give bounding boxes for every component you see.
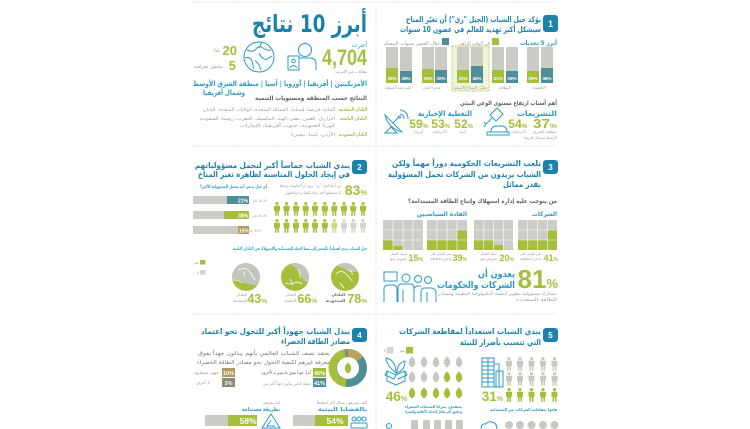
legislation group: الأوسط وشمال أفريقيا [524, 135, 557, 140]
icon: satellite dish [385, 110, 408, 133]
countries stat: 20 [223, 43, 237, 58]
panel: 2 youth responsibility [193, 159, 367, 306]
highlight box [452, 46, 489, 91]
stat: 46 percent: 46% [386, 389, 408, 404]
sustainability note: جيل الشباب يبدي اهتماماً بالسعي إلى نمط الحياة المستدامة والاستهلاك في البلدان النامية [233, 245, 367, 252]
description text [197, 349, 331, 366]
heading 4: يبذل الشباب جهوداً أكبر للتحول نحو اعتماد [201, 325, 350, 336]
chart: donut [333, 353, 363, 383]
heading 2: يبدي الشباب حماساً أكبر لتحمل مسؤولياتهم [195, 159, 350, 170]
bar chart: generations: 18-19 عام [253, 198, 267, 203]
heading 1: سيشكل أكبر تهديد للعالم في غضون 10 سنوات [400, 24, 541, 34]
legislation group: منطقة الشرق [533, 129, 557, 134]
heading 2: في إيجاد الحلول المناسبة لظاهرة تغير المناخ [198, 170, 350, 179]
stat: 31 percent [482, 389, 557, 412]
sustainable label [242, 400, 280, 413]
stat: 83 percent: 83% [345, 182, 367, 198]
description text: معرفة غيرهم لكيفية التحول نحو مصادر الطاقة الخضراء [197, 359, 330, 366]
bar: 58 percent: 58% [239, 416, 257, 426]
chart: developed 43 percent: 43% [247, 292, 267, 306]
effort row: 46 percent: 46% [314, 371, 325, 377]
bar chart: challenges: 29% [507, 76, 517, 81]
bar chart: generations: 38% [238, 214, 249, 220]
bar chart: challenges: 40% [472, 76, 482, 81]
effort row: 3 percent: 3% [225, 381, 233, 387]
stat: 81 percent: يعدون أن [478, 267, 515, 280]
legislation group: الأمريكيتان [511, 129, 526, 134]
badge 1: 1 [548, 19, 553, 29]
regions list: الأمريكيتين | أفريقيا | أوروبا | آسيا | منطقة الشرق الأوسط [193, 79, 367, 89]
pictogram: people 31 percent [506, 357, 558, 402]
waffle: companies 41 percent: إنتاج الطاقة [520, 257, 541, 262]
legend: regions [194, 260, 206, 275]
waffle: leaders 39 percent: إنتاج الطاقة [430, 257, 451, 262]
heading 4: مصادر الطاقة الخضراء [281, 337, 350, 346]
legislation group: 37 % [533, 117, 557, 131]
frontier countries [291, 131, 367, 138]
chart: frontier 78 percent: 78% [347, 292, 367, 306]
waffle: leaders 39 percent: 39% [453, 253, 468, 263]
icon: gavel [484, 108, 509, 135]
panel: 4 green energy [194, 325, 367, 428]
heading 3: الشباب يريدون من الشركات تحمل المسؤولية [388, 170, 541, 179]
bar chart: challenges: البطالة [499, 85, 511, 90]
legend: regions: نعم [194, 261, 199, 265]
chart: emerging 66 percent [281, 263, 317, 306]
bar chart: challenges: الفقر/عدم المساواة [385, 85, 411, 90]
stat: 46 percent [386, 389, 462, 414]
bar chart: generations: +35 عام [247, 228, 262, 233]
heading 5: التي تتسبب بأضرار للبيئة [460, 337, 541, 347]
panel: 3 government and companies [383, 157, 559, 303]
frontier countries: البلدان المحدودية [339, 132, 367, 138]
legislation group [508, 109, 557, 140]
badge 2 [352, 160, 367, 174]
regions stat [194, 58, 236, 73]
environment issues label [317, 399, 367, 413]
heading 1: يؤكد جيل الشباب (الجيل "زي") أن تغيّر المناخ [406, 14, 541, 24]
heading 2 [195, 159, 350, 179]
stat: 31 percent: 31% [482, 389, 504, 404]
stat: 81 percent: تتشارك مسؤولية تطوير أنظمة التكنولوجيا النظيفة ومصادر [437, 290, 558, 297]
heading 4 [201, 325, 350, 346]
effort row: 41 percent: معظم الناس يبذلون جهداً أكثر مني [263, 380, 311, 387]
waffle: leaders 15 percent: نمط العمل [390, 252, 407, 256]
pictogram: leaves 46 percent [409, 356, 462, 398]
bar chart: challenges [385, 47, 553, 90]
bar chart: challenges: 29% [528, 76, 538, 81]
waffle: companies 20 percent: نمط العمل [480, 252, 497, 256]
effort row: 10 percent: 10% [223, 371, 234, 377]
badge 3: 3 [548, 163, 553, 172]
legend [384, 38, 557, 47]
chart: frontier 78 percent: البلدان [332, 292, 346, 297]
sustainable label: بطريقة مستدامة [242, 407, 280, 413]
heading 5: يبدي الشباب استعداداً لمقاطعة الشركات [399, 325, 541, 336]
icon: lower left [386, 424, 392, 428]
chart: emerging 66 percent: 66% [297, 292, 317, 306]
effort row: 10 percent: جهود متشابهة [194, 371, 219, 376]
politicians label: القادة السياسيين [417, 211, 467, 218]
development heading: النتائج حسب المنطقة ومستويات التنمية [255, 95, 367, 102]
stat: 31 percent: قاموا بمقاطعة الشركات غير المستدامة [490, 407, 557, 412]
regions list [193, 79, 367, 97]
bar chart: challenges: الاقتصاد [532, 85, 546, 90]
description text: يعتقد نصف الشباب العالمي بأنهم يبذلون جهداً يفوق [198, 349, 331, 357]
legend: في الوقت الراهن [459, 41, 491, 47]
awareness heading: أهم أسباب ارتفاع مستوى الوعي البيئي [460, 99, 557, 107]
environment issues label: بالقضايا البيئية [318, 407, 367, 413]
effort row: 10 percent [194, 368, 235, 377]
stat: 81 percent: 81% [518, 264, 558, 294]
badge 5: 5 [548, 331, 553, 340]
emerging countries: البرازيل، الصين، مصر، الهند، المكسيك، المغرب، روسيا، السعودية [200, 116, 335, 122]
stat: 81 percent: الشركات والحكومات [437, 280, 515, 291]
heading 3: تلعب التشريعات الحكومية دوراً مهماً ولكن [392, 157, 541, 168]
legend: yes no: نعم [400, 348, 405, 353]
bar chart: challenges: 31% [493, 76, 503, 81]
news coverage group: الأمريكيتان [432, 129, 447, 134]
developed countries: ألمانيا، فرنسا، إسبانيا، المملكة المتحدة، الولايات المتحدة، اليابان [203, 106, 336, 113]
badge 5 [543, 328, 558, 342]
environment issues label: كيف يتصرفون بشكل أكثر احتفاظاً [317, 399, 367, 405]
bar: 54 percent: 54% [326, 416, 344, 426]
emerging countries: البلدان الناشئة [340, 116, 367, 122]
waffle: leaders 39 percent [427, 220, 468, 263]
bar: 58 percent [205, 415, 257, 426]
effort row: 41 percent [263, 378, 326, 387]
developed countries: البلدان المتقدمة [339, 107, 367, 113]
interviews stat: 4,704 [322, 45, 368, 70]
bar chart: challenges: تغيّر المناخ/البيئة [454, 85, 487, 90]
chart: developed 43 percent: المتقدمة [233, 298, 247, 303]
effort row: 46 percent: أبذل جهداً يفوق ما يقوم به الآخرون [261, 369, 311, 376]
developed countries [203, 106, 367, 113]
panel: 1 biggest threat [384, 14, 558, 140]
icon: community [351, 417, 367, 428]
bar chart: generations: 21% [238, 198, 249, 204]
bar chart: challenges: 33% [423, 76, 433, 81]
effort row: 46 percent [261, 368, 326, 377]
stat: 83 percent: من أبناء الجيل "زي" يرون أن الحكومات وحدها [280, 182, 341, 188]
legend: yes no [384, 347, 413, 354]
heading 5 [399, 325, 541, 347]
bar chart: challenges: 36% [542, 76, 552, 81]
pictogram: barrels [411, 420, 463, 429]
interviews stat: مقابلات عبر الإنترنت [335, 70, 367, 75]
heading 3: بقدر مماثل [503, 180, 541, 189]
waffle: companies 41 percent: عبر العمل على [520, 252, 541, 256]
waffle: leaders 15 percent: 15% [409, 253, 424, 263]
interviews stat: أجرت [351, 40, 367, 49]
regions stat: مناطق جغرافية [194, 65, 224, 70]
bar chart: challenges: 36% [387, 76, 397, 81]
icon: seedling box [385, 358, 407, 385]
panel: top ten findings [193, 8, 368, 138]
icon: lower right cloud [481, 422, 497, 429]
waffle: companies 41 percent: 41% [544, 253, 559, 263]
waffle: companies 20 percent: 20% [500, 253, 515, 263]
countries stat: بلدًا [214, 48, 220, 54]
badge 2: 2 [357, 163, 362, 172]
icon: group of people [384, 272, 436, 302]
news coverage group: 52% [454, 117, 474, 131]
emerging countries: كوريا الجنوبية، جنوب أفريقيا، الإمارات [240, 122, 336, 129]
bar chart: challenges: 32% [458, 76, 468, 81]
chart: emerging 66 percent: البلدان [285, 292, 296, 297]
waffle: leaders 15 percent [383, 220, 424, 263]
effort row: 3 percent [196, 378, 235, 387]
legend: خلال العشر سنوات المقبلة [384, 41, 440, 47]
effort row: 3 percent: لا أعرف [196, 379, 211, 386]
chart: frontier 78 percent: المحدودية [326, 298, 346, 303]
stat: 83 percent: لا تستطيع أخذ زمام المبادرة والحلول [285, 189, 341, 195]
frontier countries: الأردن، كينيا، نيجيريا [291, 131, 335, 138]
heading 3 [388, 157, 541, 189]
bar chart: generations: 20-35 عام [253, 213, 267, 218]
bar chart: challenges: عدم الأمان [423, 85, 441, 90]
interviews stat [322, 40, 368, 75]
news coverage group: التغطية الإخبارية [418, 109, 472, 118]
stat: 46 percent: يعتقدون بمزايا المنتجات الخضراء [405, 404, 462, 409]
news coverage group: 59% [409, 117, 429, 131]
badge 3 [543, 160, 558, 174]
emerging countries [200, 116, 367, 129]
news coverage group [409, 109, 474, 134]
chart: developed 43 percent [232, 263, 267, 306]
badge 1 [543, 15, 558, 32]
waffle: leaders 15 percent: المفروض عليها [390, 257, 407, 261]
stat: 81 percent [437, 264, 558, 303]
panel: 5 boycott [384, 325, 558, 429]
stat: 83 percent [280, 182, 367, 198]
waffle: companies 20 percent: المفروض عليها [480, 257, 497, 261]
legislation group: 54% [508, 117, 528, 131]
news coverage group: آسيا [459, 129, 467, 134]
bar chart: generations [193, 196, 267, 234]
icon: interview person [288, 44, 316, 70]
icon: globe [244, 42, 274, 72]
stat: 46 percent: ويدفعون أكثر مقابل الخدمات الأخلاقية والخضراء [405, 409, 462, 414]
badge 4: 4 [357, 331, 362, 340]
bar chart: challenges: 30% [436, 76, 446, 81]
bar chart: generations: 15% [239, 228, 250, 234]
bar chart: challenges: 29% [401, 76, 411, 81]
waffle: leaders 39 percent: عبر العمل على [430, 252, 451, 256]
stat: 81 percent: الطاقة المتجددة [516, 298, 557, 303]
title: أبرز 10 نتائج [252, 8, 367, 38]
regions list: وشمال أفريقيا [203, 88, 245, 97]
chart: frontier 78 percent [326, 263, 367, 306]
icon: recycle [262, 414, 280, 428]
waffle: companies 41 percent [518, 220, 559, 263]
legend: yes no: لا [384, 348, 386, 353]
effort row: 41 percent: 41% [314, 381, 325, 387]
chart: developed 43 percent: البلدان [236, 292, 247, 297]
regions stat: 5 [229, 58, 236, 73]
responsibility question: أي جيل يدعي أنه يتحمل المسؤولية الأكبر؟ [200, 183, 267, 190]
energy question: من يتوجب عليه إدارة استهلاك وإنتاج الطاقة المستدامة؟ [408, 199, 557, 205]
legend: regions: لا [197, 271, 199, 275]
pictogram: people 83 percent [274, 202, 366, 233]
companies label: الشركات [532, 211, 557, 218]
legend: أبرز 5 تحديات [520, 38, 557, 47]
news coverage group: 53% [431, 117, 451, 131]
bar: 54 percent [293, 415, 348, 426]
badge 4 [352, 328, 367, 342]
sustainable label: كيف يتصرفون [263, 400, 280, 405]
countries stat [214, 43, 237, 58]
heading 1 [400, 14, 541, 34]
waffle: companies 20 percent [474, 220, 515, 263]
chart: emerging 66 percent: الناشئة [285, 298, 296, 303]
icon: buildings [482, 358, 503, 387]
pictogram: lower right [505, 421, 558, 429]
legislation group: التشريعات [517, 109, 557, 118]
news coverage group: أوروبا [414, 129, 423, 134]
